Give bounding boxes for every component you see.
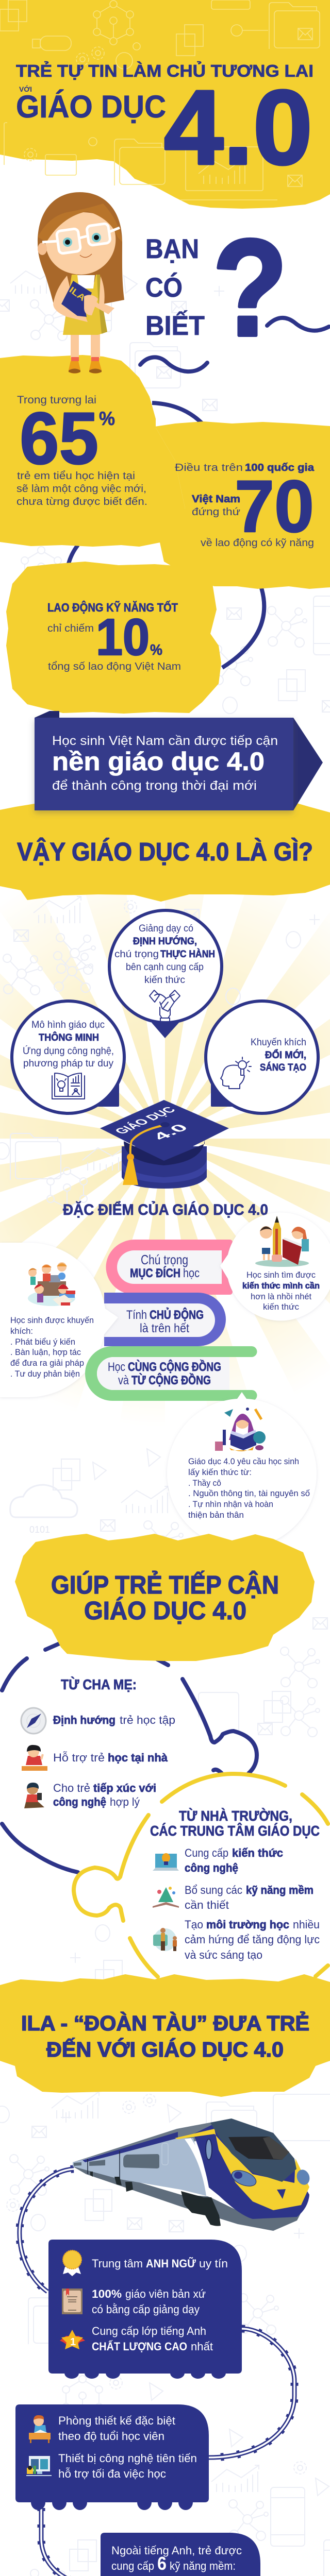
- book: community (green): [85, 1346, 257, 1401]
- list item: technology knowledge: công nghệ: [185, 1861, 238, 1874]
- bubble: innovation: [206, 1001, 318, 1113]
- underbody: [73, 2164, 309, 2231]
- bubble: guided teaching: [109, 910, 222, 1038]
- book text: CHỦ ĐỘNG: [150, 1307, 204, 1322]
- schools heading: [150, 1808, 320, 1839]
- book text: là trên hết: [140, 1321, 189, 1335]
- list item: orientation: [53, 1714, 175, 1726]
- heading panel: ILA train: [0, 1974, 330, 2097]
- title: [16, 61, 314, 187]
- book text: CÙNG CỘNG ĐỒNG: [128, 1360, 221, 1374]
- book: proactive (purple): [104, 1293, 226, 1346]
- list item: soft skills: [185, 1884, 314, 1911]
- icon: medal: [63, 2250, 81, 2276]
- speech text: Giáo dục 4.0 yêu cầu học sinh: [188, 1456, 299, 1466]
- survey line: Điều tra trên: [175, 462, 243, 473]
- front emblem: [277, 2189, 286, 2199]
- bubble text: kiến thức: [144, 975, 185, 986]
- list item: home study: học tại nhà: [108, 1751, 168, 1764]
- list item: quality: CHẤT LƯỢNG CAO: [92, 2340, 187, 2353]
- headlights: [229, 2167, 258, 2189]
- bubble text: bên cạnh cung cấp: [126, 962, 204, 973]
- icon: cloud: 0101: [29, 1524, 50, 1535]
- intro line: Trong tương lai: [17, 394, 96, 406]
- Vietnam label: [192, 494, 240, 518]
- navy top stripe: [82, 2132, 178, 2162]
- label: LAO ĐỘNG KỸ NĂNG TỐT: [47, 600, 178, 614]
- speech text: . Bàn luận, hợp tác: [10, 1347, 81, 1357]
- caption: tổng số lao động Việt Nam: [48, 661, 181, 672]
- panel: train car 1: [48, 2240, 242, 2379]
- icon: joined hands: [150, 990, 180, 1023]
- list item: technology: tiếp xúc với: [93, 1782, 156, 1794]
- list item: environment: Tạo: [185, 1918, 203, 1931]
- icon: boy with tablet: [24, 1783, 44, 1808]
- title: VỚI: [19, 84, 32, 93]
- navy nose: [193, 2123, 309, 2219]
- puzzle outline: [74, 1774, 328, 1977]
- panel: parents puzzle circle: [0, 1642, 258, 1879]
- icon: boy at desk: [22, 1745, 47, 1771]
- book text: Tính: [126, 1308, 147, 1322]
- speech text: kiến thức: [263, 1302, 299, 1312]
- description: sẽ làm một công việc mới,: [16, 483, 146, 495]
- list item: environment: nhiều: [293, 1918, 320, 1931]
- description: [16, 470, 147, 507]
- ribbon fold: [35, 711, 59, 718]
- speech text: . Nguồn thông tin, tài nguyên số: [188, 1488, 310, 1498]
- bubble text: Giảng dạy có: [139, 923, 193, 934]
- title: 4.0: [164, 69, 312, 187]
- list item: soft skills: kỹ năng mềm: [246, 1884, 314, 1896]
- list item: teachers: giáo viên bản xứ: [125, 2287, 206, 2300]
- cap label: GIÁO DỤC: [111, 1105, 179, 1136]
- skills intro: 6: [157, 2553, 167, 2574]
- speech text: [10, 1315, 94, 1379]
- list item: environment: môi trường học: [206, 1918, 289, 1931]
- header yellow blob: [0, 0, 330, 209]
- banner text: [52, 734, 278, 793]
- dress: [63, 275, 107, 335]
- big number 65: 65: [20, 398, 98, 480]
- list item: environment: và sức sáng tạo: [185, 1948, 262, 1961]
- white stripe: [185, 2138, 210, 2197]
- bubble text: THÔNG MINH: [39, 1032, 99, 1043]
- big question mark: ?: [212, 210, 288, 365]
- panel: schools puzzle circle: [74, 1773, 330, 2003]
- book text: [130, 1252, 200, 1280]
- side window: [206, 2139, 212, 2160]
- speech text: khích:: [10, 1326, 33, 1336]
- panel: 10 percent blob: [6, 562, 221, 714]
- banner body: [35, 718, 293, 810]
- speech text: hơn là nhồi nhét: [251, 1292, 311, 1301]
- list item: technology: Cho trẻ: [53, 1782, 90, 1794]
- arrow tip: [293, 718, 323, 810]
- list item: equipment: Thiết bị công nghệ tiên tiến: [58, 2452, 197, 2465]
- header line icons on yellow: [0, 0, 320, 200]
- icon: compass: [21, 1708, 46, 1734]
- roof: [73, 2119, 232, 2164]
- banner text: Học sinh Việt Nam cần được tiếp cận: [52, 734, 278, 748]
- railway tracks: [20, 2169, 294, 2576]
- eyes: [63, 238, 72, 247]
- book text: học: [183, 1266, 200, 1280]
- book text: Chú trọng: [141, 1252, 188, 1267]
- speech circle: find knowledge: [220, 1213, 330, 1321]
- survey line: 100 quốc gia: [245, 462, 315, 473]
- caption: về lao động có kỹ năng: [201, 537, 314, 549]
- list item: reputable centre: Trung tâm: [92, 2257, 143, 2270]
- speech circle: student voice: [0, 1243, 118, 1397]
- parents heading: TỪ CHA MẸ:: [61, 1676, 137, 1692]
- survey line: [175, 462, 315, 473]
- tassel: [123, 1122, 170, 1185]
- book text: Học: [108, 1360, 125, 1374]
- book: purpose (pink): [106, 1240, 233, 1295]
- list item: technology: hợp lý: [110, 1795, 140, 1808]
- list item: teachers: có bằng cấp giảng dạy: [92, 2303, 200, 2316]
- list item: technology knowledge: kiến thức: [232, 1846, 283, 1859]
- cap label: 4.0: [149, 1122, 192, 1142]
- list item: classrooms: Phòng thiết kế đặc biệt: [58, 2414, 175, 2427]
- arms: [53, 276, 114, 322]
- heading: what is education 4.0: VẬY GIÁO DỤC 4.0 LÀ GÌ?: [17, 838, 313, 866]
- list item: environment: cảm hứng để tăng động lực: [185, 1933, 320, 1946]
- panel: rank 70 blob: [155, 421, 330, 589]
- icon: gold star: [60, 2330, 85, 2349]
- speech text: [188, 1456, 310, 1520]
- icon: computer: [26, 2456, 52, 2476]
- big number 10: 10: [96, 608, 150, 666]
- heading panel: ILA train: ILA - “ĐOÀN TÀU” ĐƯA TRẺ: [21, 2011, 309, 2035]
- speech text: lấy kiến thức từ:: [188, 1467, 252, 1477]
- list item: quality: Cung cấp lớp tiếng Anh: [92, 2325, 206, 2337]
- list item: reputable centre: uy tín: [199, 2257, 228, 2270]
- heading: Bạn có biết: BẠN: [145, 234, 199, 264]
- bubble: smart model: [12, 1001, 124, 1113]
- icon: gold star: 1: [70, 2336, 76, 2348]
- list item: classrooms: [58, 2414, 175, 2443]
- heading: Bạn có biết: BIẾT: [145, 310, 205, 341]
- list item: quality: nhất: [191, 2340, 213, 2353]
- yellow blob under banner: [0, 802, 330, 902]
- skills intro: kỹ năng mềm:: [170, 2560, 236, 2572]
- face: [45, 212, 116, 275]
- schools heading: TỪ NHÀ TRƯỜNG,: [179, 1808, 292, 1824]
- list item: technology: công nghệ: [53, 1795, 106, 1808]
- panel: train car 2: [15, 2404, 209, 2510]
- list item: reputable centre: [92, 2257, 228, 2270]
- book text: [108, 1360, 221, 1387]
- book text: TỪ CỘNG ĐỒNG: [131, 1373, 211, 1387]
- percent sign: %: [99, 408, 115, 429]
- bubble text: chú trọng: [114, 949, 159, 960]
- icon: diploma: [62, 2289, 82, 2314]
- bubble text: [23, 1020, 114, 1069]
- heading panel: ILA train: ĐẾN VỚI GIÁO DỤC 4.0: [46, 2038, 284, 2061]
- list item: environment: [185, 1918, 320, 1961]
- icon: girl holding book: [38, 192, 124, 374]
- list item: classrooms: theo độ tuổi học viên: [58, 2430, 164, 2443]
- heading panel: help children access: [15, 1534, 315, 1661]
- wheels: [64, 2367, 226, 2379]
- heading: Bạn có biết: [145, 234, 205, 341]
- description: trẻ em tiểu học hiện tại: [17, 470, 135, 482]
- list item: technology: [53, 1782, 156, 1808]
- cap board: [100, 1100, 229, 1161]
- icon: girl holding book: ILA: [68, 285, 87, 303]
- icon: laptop with bulb: [153, 1853, 179, 1871]
- banner: need for education 4.0: [0, 711, 330, 902]
- illustration: kids with pencil and book: [255, 1216, 309, 1267]
- icon: high-speed train: [73, 2119, 311, 2231]
- only: chỉ chiếm: [47, 623, 94, 634]
- bubble text: [251, 1037, 306, 1073]
- list item: equipment: hỗ trợ tối đa việc học: [58, 2467, 166, 2480]
- list item: soft skills: cần thiết: [185, 1899, 229, 1911]
- illustration: children studying: [28, 1262, 75, 1306]
- banner text: nền giáo dục 4.0: [52, 747, 265, 776]
- book text: và: [118, 1374, 129, 1387]
- silver side: [73, 2138, 208, 2196]
- speech text: [242, 1270, 320, 1312]
- wheels: [31, 2495, 193, 2510]
- puzzle outline: [2, 1642, 257, 1872]
- list item: home study: Hỗ trợ trẻ: [53, 1751, 105, 1764]
- list item: orientation: trẻ học tập: [120, 1714, 175, 1726]
- heading panel: help children access: GIÚP TRẺ TIẾP CẬN: [51, 1571, 279, 1599]
- speech text: Học sinh được khuyến: [10, 1315, 94, 1325]
- icon: book with bulb: [52, 1073, 85, 1099]
- list item: home study: [53, 1751, 168, 1764]
- cowling: [210, 2119, 296, 2182]
- bubble text: ĐỊNH HƯỚNG,: [133, 936, 197, 947]
- list item: quality: [92, 2325, 213, 2353]
- banner text: để thành công trong thời đại mới: [52, 778, 257, 793]
- skills intro: Ngoài tiếng Anh, trẻ được: [111, 2544, 242, 2557]
- Vietnam label: đứng thứ: [192, 506, 240, 518]
- bubble text: Mô hình giáo dục: [31, 1020, 105, 1030]
- list item: technology knowledge: [185, 1846, 283, 1874]
- bubble text: ĐỔI MỚI,: [265, 1049, 306, 1061]
- bubble text: THỰC HÀNH: [160, 948, 215, 960]
- book: [61, 281, 92, 317]
- speech text: . Tự nhìn nhận và hoàn: [188, 1499, 273, 1509]
- list item: orientation: Định hướng: [53, 1714, 116, 1726]
- icon: graduation cap: [100, 1100, 229, 1189]
- speech text: để đưa ra giải pháp: [10, 1358, 84, 1368]
- hand: [84, 295, 98, 315]
- list item: technology knowledge: Cung cấp: [185, 1846, 228, 1859]
- panel: 65 percent blob: [0, 355, 185, 547]
- list item: reputable centre: ANH NGỮ: [146, 2257, 196, 2270]
- speech text: . Phát biểu ý kiến: [10, 1337, 75, 1347]
- windows: [74, 2154, 159, 2168]
- legs: [71, 330, 100, 358]
- description: chưa từng được biết đến.: [16, 496, 147, 507]
- list item: teachers: 100%: [92, 2287, 122, 2300]
- speech text: . Tư duy phản biện: [10, 1369, 80, 1379]
- speech text: . Thầy cô: [188, 1478, 221, 1488]
- bubble text: Ứng dụng công nghệ,: [23, 1045, 114, 1057]
- big number 70: 70: [235, 466, 314, 548]
- list item: teachers: [92, 2287, 206, 2316]
- socks and shoes: [69, 357, 102, 374]
- list item: equipment: [58, 2452, 197, 2480]
- illustration: girl reading: [215, 1408, 266, 1451]
- hair back: [38, 192, 124, 304]
- title: TRẺ TỰ TIN LÀM CHỦ TƯƠNG LAI: [16, 61, 314, 80]
- bubble text: phương pháp tư duy: [23, 1058, 113, 1069]
- speech text: thiện bản thân: [188, 1510, 244, 1520]
- heading: Bạn có biết: CÓ: [145, 272, 183, 303]
- bubble text: Khuyến khích: [251, 1037, 306, 1048]
- title: GIÁO DỤC: [16, 89, 166, 124]
- sunburst rays: [0, 850, 330, 1427]
- bubble text: [114, 923, 215, 986]
- bubble text: SÁNG TẠO: [260, 1062, 306, 1073]
- heading panel: help children access: GIÁO DỤC 4.0: [84, 1597, 246, 1625]
- list item: soft skills: Bổ sung các: [185, 1884, 242, 1896]
- icon: teacher and student: [153, 1928, 177, 1951]
- icon: book tree: [153, 1887, 179, 1908]
- icon: cloud: [10, 1485, 77, 1535]
- icon: head with bulb: [221, 1057, 251, 1089]
- yellow stripe: [175, 2129, 309, 2210]
- icon: boy at desk: [29, 2415, 51, 2443]
- speech text: Học sinh tìm được: [246, 1270, 316, 1280]
- heading: features: ĐẶC ĐIỂM CỦA GIÁO DỤC 4.0: [63, 1201, 268, 1218]
- bogies: [90, 2172, 221, 2226]
- skills intro: [111, 2544, 242, 2574]
- Vietnam label: Việt Nam: [192, 494, 240, 505]
- windshield: [228, 2137, 289, 2160]
- book text: [126, 1307, 204, 1335]
- squiggles and connecting arcs: [69, 318, 329, 668]
- speech text: kiến thức mình cần: [242, 1281, 320, 1291]
- book text: MỤC ĐÍCH: [130, 1266, 180, 1280]
- glasses: [42, 223, 120, 254]
- percent sign: %: [150, 642, 162, 658]
- cap body: [122, 1146, 207, 1189]
- skills intro: cung cấp: [111, 2560, 154, 2572]
- speech circle: sources of knowledge: [167, 1392, 317, 1548]
- panel: train car 3: [101, 2533, 260, 2576]
